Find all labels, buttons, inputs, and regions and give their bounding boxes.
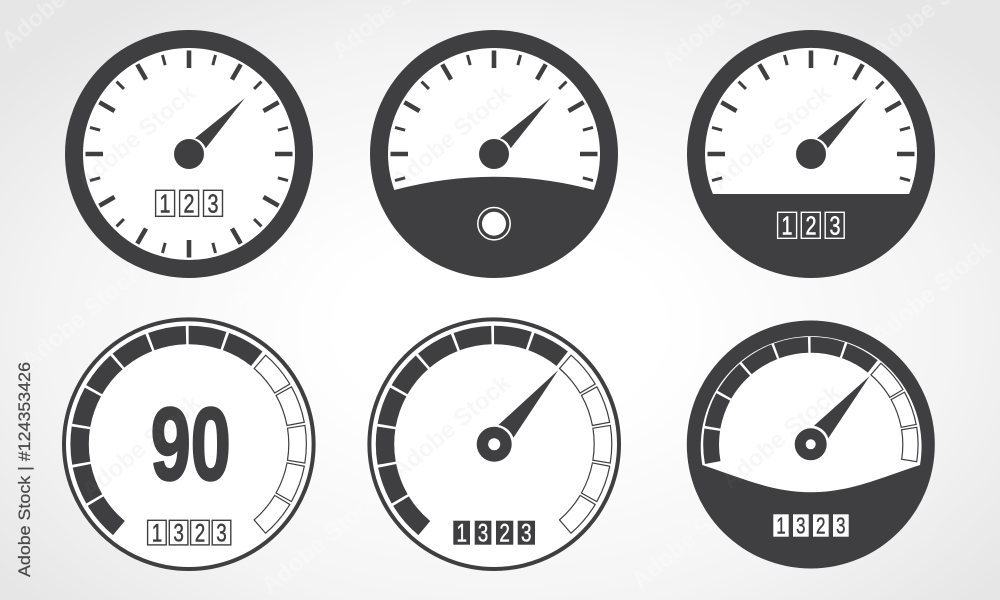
watermark text: Adobe Stock bbox=[537, 239, 667, 355]
odometer 1323: 3 bbox=[836, 513, 846, 539]
faint watermark overlay: Adobe Stock bbox=[717, 379, 847, 495]
dial ring bbox=[74, 39, 304, 269]
odometer 1323 bbox=[148, 519, 231, 547]
odometer 123 bbox=[156, 188, 222, 218]
odometer 123: 3 bbox=[830, 210, 840, 240]
needle bbox=[796, 98, 867, 169]
watermark text: Adobe Stock bbox=[627, 479, 757, 595]
needle bbox=[477, 370, 558, 462]
needle bbox=[479, 98, 550, 169]
odometer 123: 2 bbox=[806, 210, 816, 240]
odometer 1323: 3 bbox=[216, 519, 227, 547]
outer ring bbox=[64, 319, 314, 569]
gauge 5: segmented ring with needle bbox=[340, 290, 648, 598]
dial body bbox=[687, 320, 935, 568]
stock credit text: Adobe Stock | #124353426 bbox=[15, 362, 34, 577]
watermark text: Adobe Stock bbox=[17, 259, 147, 375]
faint watermark overlay: Adobe Stock bbox=[707, 79, 837, 195]
odometer 123: 1 bbox=[782, 210, 792, 240]
odometer 1323: 2 bbox=[195, 519, 205, 547]
dial body bbox=[687, 30, 935, 278]
filled segments bbox=[695, 329, 926, 560]
odometer 1323: 2 bbox=[816, 513, 826, 539]
dial body bbox=[370, 30, 618, 278]
faint watermark overlay: Adobe Stock bbox=[72, 79, 202, 195]
odometer 1323: 3 bbox=[478, 519, 488, 547]
odometer 1323: 1 bbox=[152, 519, 162, 547]
empty segments bbox=[251, 355, 311, 537]
odometer 1323 bbox=[773, 513, 849, 539]
needle bbox=[174, 98, 245, 169]
filled segments bbox=[340, 290, 648, 598]
tick marks bbox=[708, 50, 914, 181]
needle bbox=[795, 376, 870, 460]
watermark text: Adobe Stock bbox=[227, 199, 357, 315]
white dial face bbox=[701, 336, 922, 492]
tick marks bbox=[86, 50, 293, 258]
odometer 1323 bbox=[453, 519, 535, 547]
odometer 1323: 3 bbox=[173, 519, 184, 547]
faint watermark overlay bbox=[72, 79, 847, 505]
white dial face bbox=[705, 48, 917, 194]
watermark text: Adobe Stock bbox=[867, 234, 997, 350]
odometer 123 bbox=[778, 210, 844, 240]
faint watermark overlay: Adobe Stock bbox=[387, 369, 517, 485]
gauge 4: segmented ring with digital 90 bbox=[35, 290, 343, 598]
speed readout 90: 90 bbox=[151, 386, 231, 502]
filled segments bbox=[35, 290, 343, 598]
gauge 1: full dial with tick marks bbox=[74, 39, 304, 269]
empty segments bbox=[556, 355, 617, 537]
white dial face bbox=[388, 48, 600, 190]
faint watermark overlay: Adobe Stock bbox=[387, 79, 517, 195]
tick marks bbox=[390, 50, 598, 181]
odometer 1323: 2 bbox=[499, 519, 510, 547]
empty segments bbox=[868, 363, 923, 464]
knob bbox=[478, 208, 510, 240]
odometer 123: 3 bbox=[208, 188, 218, 218]
gauge 6: segmented arc with curved lower panel bbox=[687, 320, 935, 568]
odometer 1323: 3 bbox=[521, 519, 532, 547]
faint watermark overlay: Adobe Stock bbox=[77, 389, 207, 505]
odometer 123: 1 bbox=[160, 188, 170, 218]
odometer 123: 2 bbox=[184, 188, 194, 218]
odometer 1323: 1 bbox=[456, 519, 467, 547]
watermark text: Adobe Stock bbox=[257, 484, 387, 600]
odometer 1323: 3 bbox=[796, 513, 806, 539]
gauge 2: curved lower panel with knob bbox=[370, 30, 618, 278]
outer ring bbox=[369, 319, 619, 569]
odometer 1323: 1 bbox=[776, 513, 786, 539]
gauge 3: flat lower panel with odometer bbox=[687, 30, 935, 278]
